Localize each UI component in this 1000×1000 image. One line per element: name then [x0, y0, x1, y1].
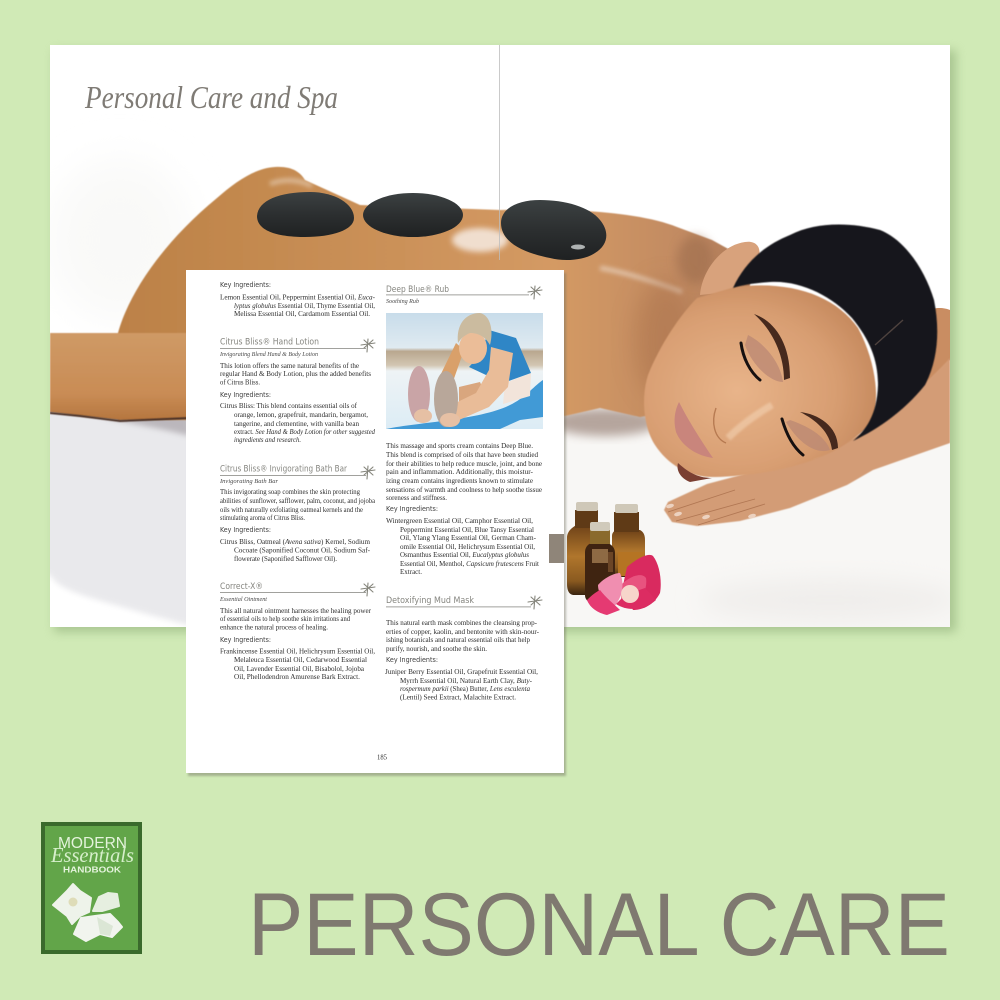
logo: Modern Essentials Handbook — [41, 822, 142, 954]
woman: left arm — [50, 333, 190, 421]
shorts — [503, 373, 531, 404]
logo flowers — [53, 884, 122, 941]
logo text: HANDBOOK — [63, 866, 121, 874]
text: Deep Blue description: pain and inflammation. Additionally, this moistur- — [386, 467, 533, 476]
hands — [414, 409, 432, 423]
photo: woman stretching — [386, 313, 543, 429]
section: Detoxifying Mud Mask — [385, 596, 542, 702]
section: Correct-X: Essential Ointment — [219, 596, 267, 603]
heading: PERSONAL CARE: PERSONAL CARE — [248, 874, 950, 974]
section: Citrus Bliss Hand Lotion: Invigorating Blend Hand & Body Lotion — [219, 351, 319, 358]
blue top — [469, 330, 531, 383]
section: Detoxifying Mud Mask: erties of copper, kaolin, and bentonite with skin-nour- — [386, 627, 539, 636]
page tab — [549, 534, 564, 563]
hair highlight — [875, 320, 903, 345]
blue mat — [386, 380, 543, 429]
section: Citrus Bliss Hand Lotion: Key Ingredients: — [220, 391, 271, 399]
section: Citrus Bliss Invigorating Bath Bar: Citrus Bliss® Invigorating Bath Bar — [220, 464, 347, 474]
section: Detoxifying Mud Mask: Key Ingredients: — [386, 656, 438, 664]
section: Citrus Bliss Hand Lotion: tangerine, and clementine, with vanilla bean — [234, 419, 359, 428]
ornament — [528, 596, 542, 609]
section: Citrus Bliss Invigorating Bath Bar: oils with naturally exfoliating oatmeal kernels and the — [220, 505, 364, 514]
ornament — [361, 466, 375, 479]
section: Detoxifying Mud Mask: ishing botanicals and natural essential oils that help — [386, 635, 530, 644]
text: key ingredients continued: lyptus globulus Essential Oil, Thyme Essential Oil, — [234, 301, 375, 310]
text: key ingredients continued: Melissa Essential Oil, Cardamom Essential Oil. — [234, 309, 370, 318]
towel: shadow below arm — [114, 420, 186, 438]
text: Deep Blue description: Peppermint Essential Oil, Blue Tansy Essential — [400, 525, 534, 534]
spread shadow — [54, 50, 956, 632]
text: key ingredients continued — [220, 281, 375, 318]
section: Detoxifying Mud Mask: Myrrh Essential Oil, Natural Earth Clay, Buty- — [400, 676, 532, 685]
section: Detoxifying Mud Mask: Detoxifying Mud Mask — [386, 596, 475, 606]
bottle 2 — [585, 522, 615, 603]
text: Deep Blue description: Wintergreen Essential Oil, Camphor Essential Oil, — [386, 516, 533, 525]
section: Correct-X: Correct-X® — [220, 582, 263, 592]
woman: lips — [675, 402, 713, 458]
section: Correct-X: enhance the natural process of healing. — [220, 622, 328, 632]
woman: face — [644, 285, 876, 477]
text: key ingredients continued: Key Ingredients: — [220, 281, 271, 289]
text: Deep Blue description: for their abilities to help reduce muscle, joint, and bone — [386, 459, 543, 468]
section: Citrus Bliss Invigorating Bath Bar: Citrus Bliss, Oatmeal (Avena sativa) Kernel, Sodium — [220, 537, 370, 546]
shoes — [408, 366, 430, 422]
section: Detoxifying Mud Mask: rospermum parkii (Shea) Butter, Lens esculenta — [400, 684, 530, 693]
panel: spa photo spread — [40, 45, 960, 627]
text: Deep Blue description: Oil, Ylang Ylang Essential Oil, German Cham- — [400, 533, 536, 542]
far arm — [441, 343, 462, 378]
logo text: Essentials — [50, 843, 134, 867]
section: Citrus Bliss Invigorating Bath Bar: This invigorating soap combines the skin protecting — [220, 487, 360, 496]
bottle 1 — [567, 502, 598, 595]
text: Deep Blue description: izing cream contains ingredients known to stimulate — [386, 476, 534, 485]
title: Personal Care and Spa: Personal Care and Spa — [84, 79, 338, 115]
woman: arm and hand — [664, 358, 950, 526]
towel: right side — [550, 408, 960, 627]
section: Citrus Bliss Hand Lotion: regular Hand & Body Lotion, plus the added benefits — [220, 369, 371, 378]
woman: nose — [714, 408, 726, 443]
section heading: Deep Blue Rub: Deep Blue® Rub — [386, 285, 449, 295]
section: Citrus Bliss Invigorating Bath Bar — [219, 464, 376, 563]
section heading: Deep Blue Rub: Soothing Rub — [386, 298, 420, 305]
stone 3 — [501, 200, 606, 260]
section: Correct-X — [219, 582, 375, 681]
text: Deep Blue description — [386, 441, 543, 576]
section: Correct-X: Oil, Phellodendron Amurense Bark Extract. — [234, 672, 360, 681]
logo text — [50, 835, 134, 874]
section: Citrus Bliss Hand Lotion: ingredients and research. — [234, 435, 301, 444]
woman: eyebrows — [754, 314, 838, 450]
section: Correct-X: This all natural ointment harnesses the healing power — [220, 606, 371, 615]
text: Deep Blue description: This blend is comprised of oils that have been studied — [386, 450, 538, 459]
fingers — [668, 490, 765, 525]
panel: book page — [186, 270, 564, 773]
stone 1 — [257, 192, 354, 237]
woman: chin shadow — [678, 463, 712, 482]
text: Deep Blue description: omile Essential Oil, Helichrysum Essential Oil, — [400, 542, 535, 551]
woman: ear — [700, 242, 759, 295]
text: Deep Blue description: This massage and sports cream contains Deep Blue. — [386, 441, 533, 450]
pink flower — [587, 555, 661, 615]
text: Deep Blue description: Extract. — [400, 567, 422, 576]
section: Detoxifying Mud Mask: Juniper Berry Essential Oil, Grapefruit Essential Oil, — [385, 667, 538, 676]
section: Correct-X: Key Ingredients: — [220, 636, 271, 644]
hair — [458, 313, 492, 345]
woman: eyelids — [745, 335, 830, 451]
bottle 3 — [612, 504, 645, 577]
section: Citrus Bliss Hand Lotion: orange, lemon, grapefruit, mandarin, bergamot, — [234, 410, 368, 419]
section: Citrus Bliss Hand Lotion — [219, 338, 375, 444]
soft towel over upper back — [50, 160, 190, 320]
text: key ingredients continued: Lemon Essential Oil, Peppermint Essential Oil, Euca- — [220, 292, 375, 302]
text: Deep Blue description: Key Ingredients: — [386, 505, 438, 513]
section: Citrus Bliss Hand Lotion: extract. See Hand & Body Lotion for other suggested — [234, 427, 375, 436]
page number: 185 — [377, 752, 387, 762]
spine fold — [499, 45, 500, 260]
near arm — [456, 347, 513, 420]
section: Correct-X: Oil, Lavender Essential Oil, Bisabolol, Jojoba — [234, 664, 365, 673]
ornament — [361, 583, 375, 596]
woman: closed eyes — [741, 343, 803, 455]
ornament — [361, 339, 375, 352]
section: Citrus Bliss Invigorating Bath Bar: Cocoate (Saponified Coconut Oil, Sodium Saf- — [234, 546, 370, 554]
section: Citrus Bliss Hand Lotion: of Citrus Bliss. — [220, 378, 260, 386]
fingernails — [666, 503, 756, 520]
section: Detoxifying Mud Mask: This natural earth mask combines the cleansing prop- — [386, 618, 537, 627]
section: Correct-X: Frankincense Essential Oil, Helichrysum Essential Oil, — [220, 646, 375, 656]
section: Citrus Bliss Hand Lotion: Citrus Bliss® Hand Lotion — [220, 338, 319, 348]
section: Correct-X: Melaleuca Essential Oil, Cedarwood Essential — [234, 655, 367, 664]
text: Deep Blue description: Osmanthus Essential Oil, Eucalyptus globulus — [400, 550, 529, 559]
section heading: Deep Blue Rub — [386, 285, 542, 305]
head — [459, 332, 487, 364]
woman: hair — [733, 225, 937, 441]
section: Citrus Bliss Invigorating Bath Bar: abilities of sunflower, safflower, palm, coconut, and jojoba — [220, 496, 376, 505]
section: Citrus Bliss Hand Lotion: This lotion offers the same natural benefits of the — [220, 361, 360, 370]
page shadow — [188, 273, 566, 776]
section: Citrus Bliss Invigorating Bath Bar: Key Ingredients: — [220, 526, 271, 534]
thigh — [459, 382, 481, 402]
text: Deep Blue description: Essential Oil, Menthol, Capsicum frutescens Fruit — [400, 559, 540, 568]
text: Deep Blue description: sensations of warmth and coolness to help soothe tissue — [386, 485, 543, 494]
woman: nose highlight — [728, 405, 772, 438]
section: Correct-X: of essential oils to help soothe skin irritations and — [220, 614, 350, 623]
section: Citrus Bliss Hand Lotion: Citrus Bliss: This blend contains essential oils of — [220, 401, 357, 410]
section: Citrus Bliss Invigorating Bath Bar: Invigorating Bath Bar — [219, 478, 278, 485]
text: Deep Blue description: soreness and stiffness. — [386, 493, 447, 502]
section: Detoxifying Mud Mask: (Lentil) Seed Extract, Malachite Extract. — [400, 692, 516, 702]
section: Citrus Bliss Invigorating Bath Bar: stimulating aroma of Citrus Bliss. — [220, 513, 305, 522]
ornament — [528, 286, 542, 299]
towel: left fold — [50, 412, 186, 625]
section: Citrus Bliss Invigorating Bath Bar: flowerate (Saponified Safflower Oil). — [234, 554, 337, 563]
woman: body — [118, 167, 752, 420]
section: Detoxifying Mud Mask: purify, nourish, and soothe the skin. — [386, 644, 487, 653]
logo text: MODERN — [58, 835, 127, 852]
woman: far arm — [925, 308, 950, 385]
stone 2 — [363, 193, 463, 237]
